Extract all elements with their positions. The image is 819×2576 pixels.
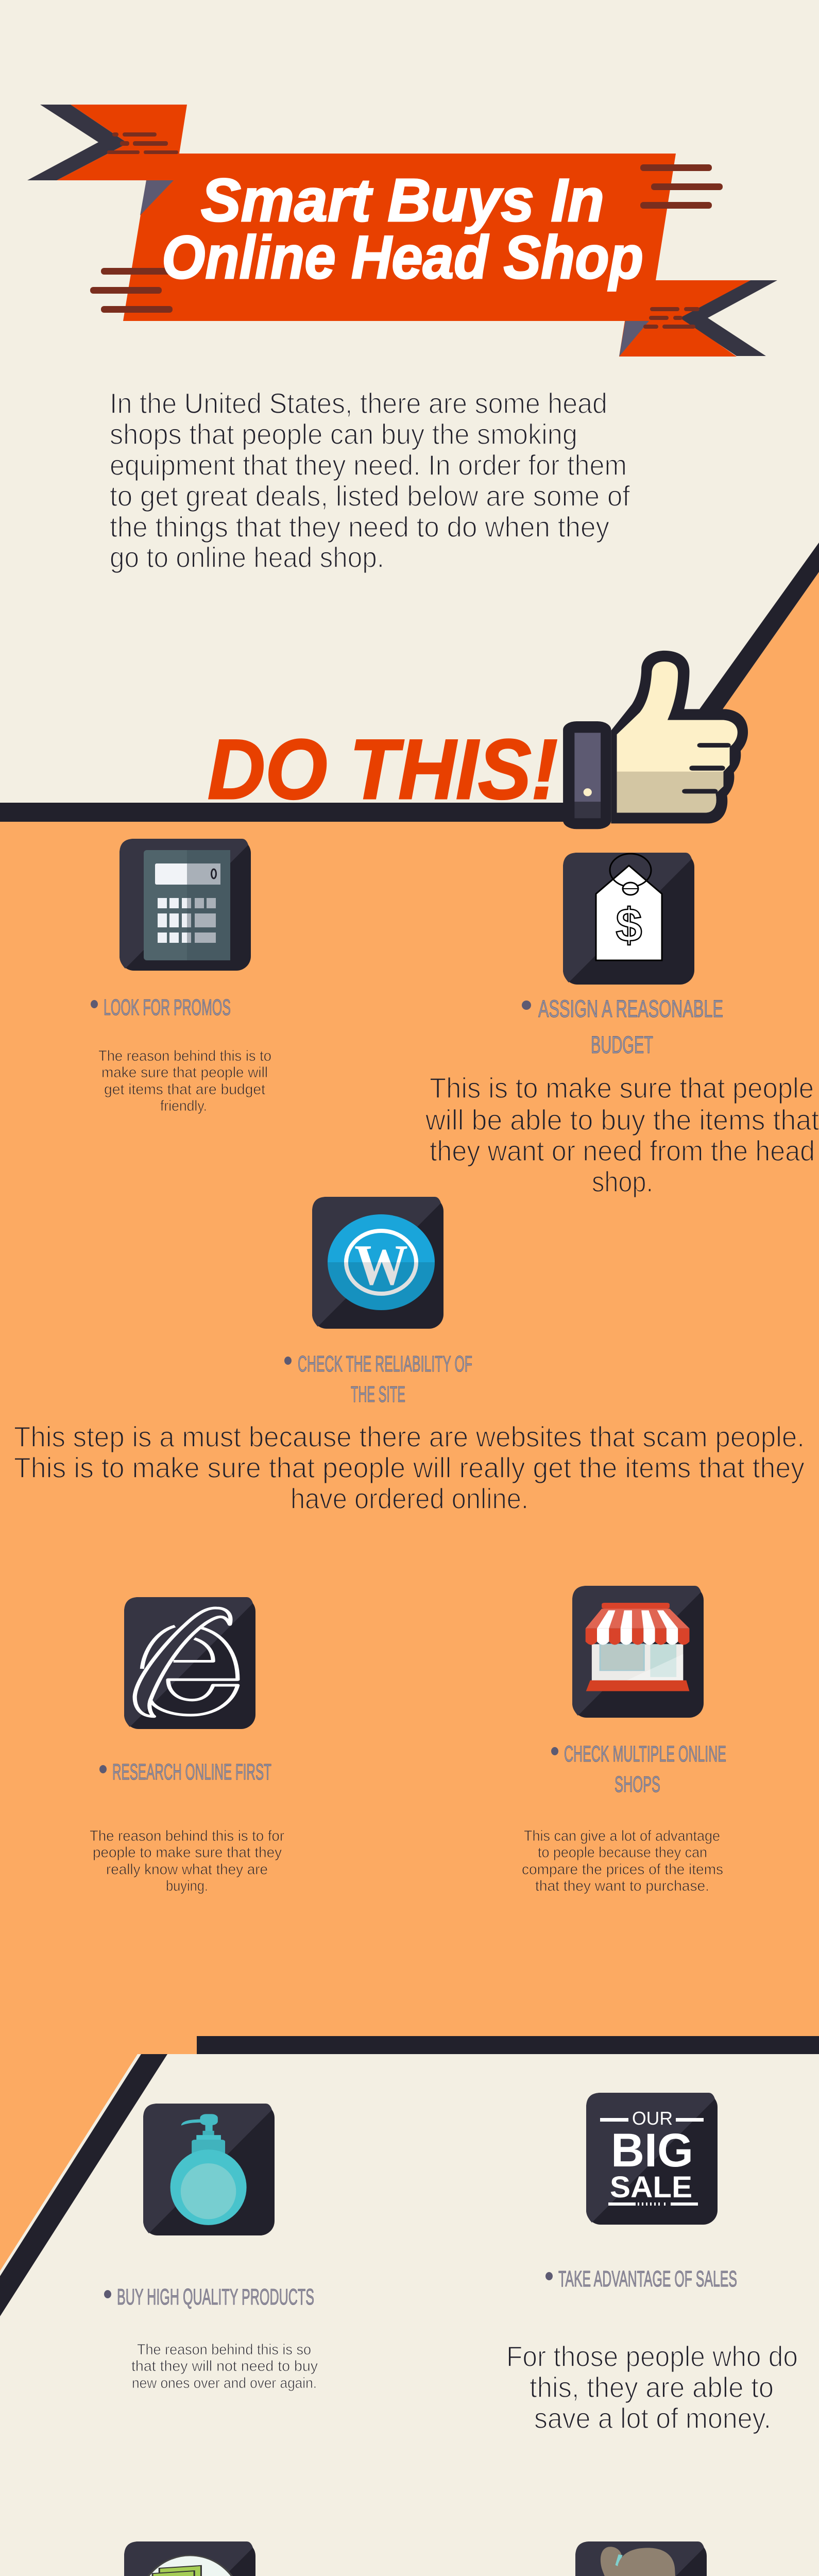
heading: THE SITE <box>351 1382 405 1407</box>
icon: money and hands <box>124 2541 255 2576</box>
description: buying. <box>166 1878 208 1894</box>
description: to people because they can <box>538 1844 707 1861</box>
description: that they will not need to buy <box>131 2358 318 2375</box>
item: assign a reasonable budget <box>425 853 819 1198</box>
diagonal stripe upper right <box>685 543 819 732</box>
description: new ones over and over again. <box>132 2375 317 2392</box>
description <box>90 1828 284 1894</box>
title banner <box>27 105 777 357</box>
description: make sure that people will <box>101 1064 268 1081</box>
description <box>522 1828 723 1894</box>
icon: soap bottle <box>143 2104 275 2235</box>
description: shop. <box>592 1165 653 1198</box>
intro text: the things that they need to do when they <box>110 511 609 543</box>
heading <box>99 1759 271 1785</box>
item: check multiple online shops <box>522 1586 726 1894</box>
bottom bar of orange section <box>197 2036 819 2054</box>
item: buy the needs first <box>535 2541 741 2576</box>
icon: storefront <box>572 1586 704 1718</box>
intro text: In the United States, there are some head <box>110 387 607 419</box>
description: this, they are able to <box>530 2371 774 2403</box>
intro text: go to online head shop. <box>110 541 384 573</box>
description: have ordered online. <box>291 1482 528 1515</box>
item: check the reliability of the site <box>14 1197 805 1515</box>
description <box>14 1420 805 1515</box>
item: look for promos <box>91 839 271 1114</box>
description: The reason behind this is to <box>98 1048 271 1064</box>
description: This is to make sure that people will really get the items that they <box>14 1451 805 1484</box>
heading: LOOK FOR PROMOS <box>104 995 231 1020</box>
item: always consider shipment <box>94 2541 304 2576</box>
title banner: Online Head Shop <box>162 224 643 292</box>
icon: big sale: BIG <box>611 2124 693 2177</box>
heading: RESEARCH ONLINE FIRST <box>112 1759 271 1785</box>
item: buy high quality products <box>104 2104 318 2392</box>
description: For those people who do <box>506 2340 798 2372</box>
icon: price tag <box>563 853 694 985</box>
icon: wordpress: W <box>354 1233 408 1297</box>
description <box>131 2342 318 2392</box>
panel: orange section <box>0 572 819 2271</box>
item: research online first <box>90 1597 284 1894</box>
item: take advantage of sales <box>506 2093 798 2434</box>
heading <box>522 995 723 1058</box>
horizontal bar to thumb <box>0 803 572 822</box>
heading <box>284 1351 472 1407</box>
icon: price tag: $ <box>616 899 642 952</box>
description: save a lot of money. <box>534 2402 771 2434</box>
diagonal stripe lower left <box>0 2054 167 2316</box>
description: This can give a lot of advantage <box>524 1828 720 1844</box>
icon: calculator <box>120 839 251 971</box>
icon: big sale: SALE <box>610 2171 692 2204</box>
heading <box>91 995 231 1020</box>
description <box>98 1048 271 1114</box>
description: really know what they are <box>106 1861 268 1878</box>
heading: BUY HIGH QUALITY PRODUCTS <box>117 2284 314 2310</box>
heading: BUDGET <box>591 1031 653 1058</box>
icon: big sale <box>586 2093 718 2225</box>
intro text: to get great deals, listed below are some of <box>110 480 630 512</box>
description: The reason behind this is to for <box>90 1828 284 1844</box>
icon: internet explorer <box>124 1597 255 1729</box>
description: compare the prices of the items <box>522 1861 723 1878</box>
description: The reason behind this is so <box>137 2342 311 2358</box>
heading <box>545 2266 737 2292</box>
description <box>425 1072 819 1198</box>
heading: do this: DO THIS! <box>208 722 558 817</box>
icon: big sale: OUR <box>632 2108 673 2129</box>
intro text: shops that people can buy the smoking <box>110 418 577 450</box>
heading: SHOPS <box>615 1772 660 1797</box>
heading <box>104 2284 314 2310</box>
title banner: Smart Buys In <box>201 166 604 234</box>
icon: thumbs up <box>563 651 748 829</box>
description: people to make sure that they <box>93 1844 282 1861</box>
description <box>506 2340 798 2434</box>
heading: CHECK THE RELIABILITY OF <box>298 1351 472 1377</box>
heading: ASSIGN A REASONABLE <box>538 995 723 1022</box>
icon: wordpress <box>312 1197 443 1329</box>
intro text <box>110 387 630 573</box>
description: that they want to purchase. <box>535 1878 709 1894</box>
intro text: equipment that they need. In order for them <box>110 449 627 481</box>
description: friendly. <box>160 1098 207 1114</box>
heading <box>551 1741 726 1797</box>
icon: girl with money <box>575 2541 707 2576</box>
description: get items that are budget <box>104 1081 265 1098</box>
